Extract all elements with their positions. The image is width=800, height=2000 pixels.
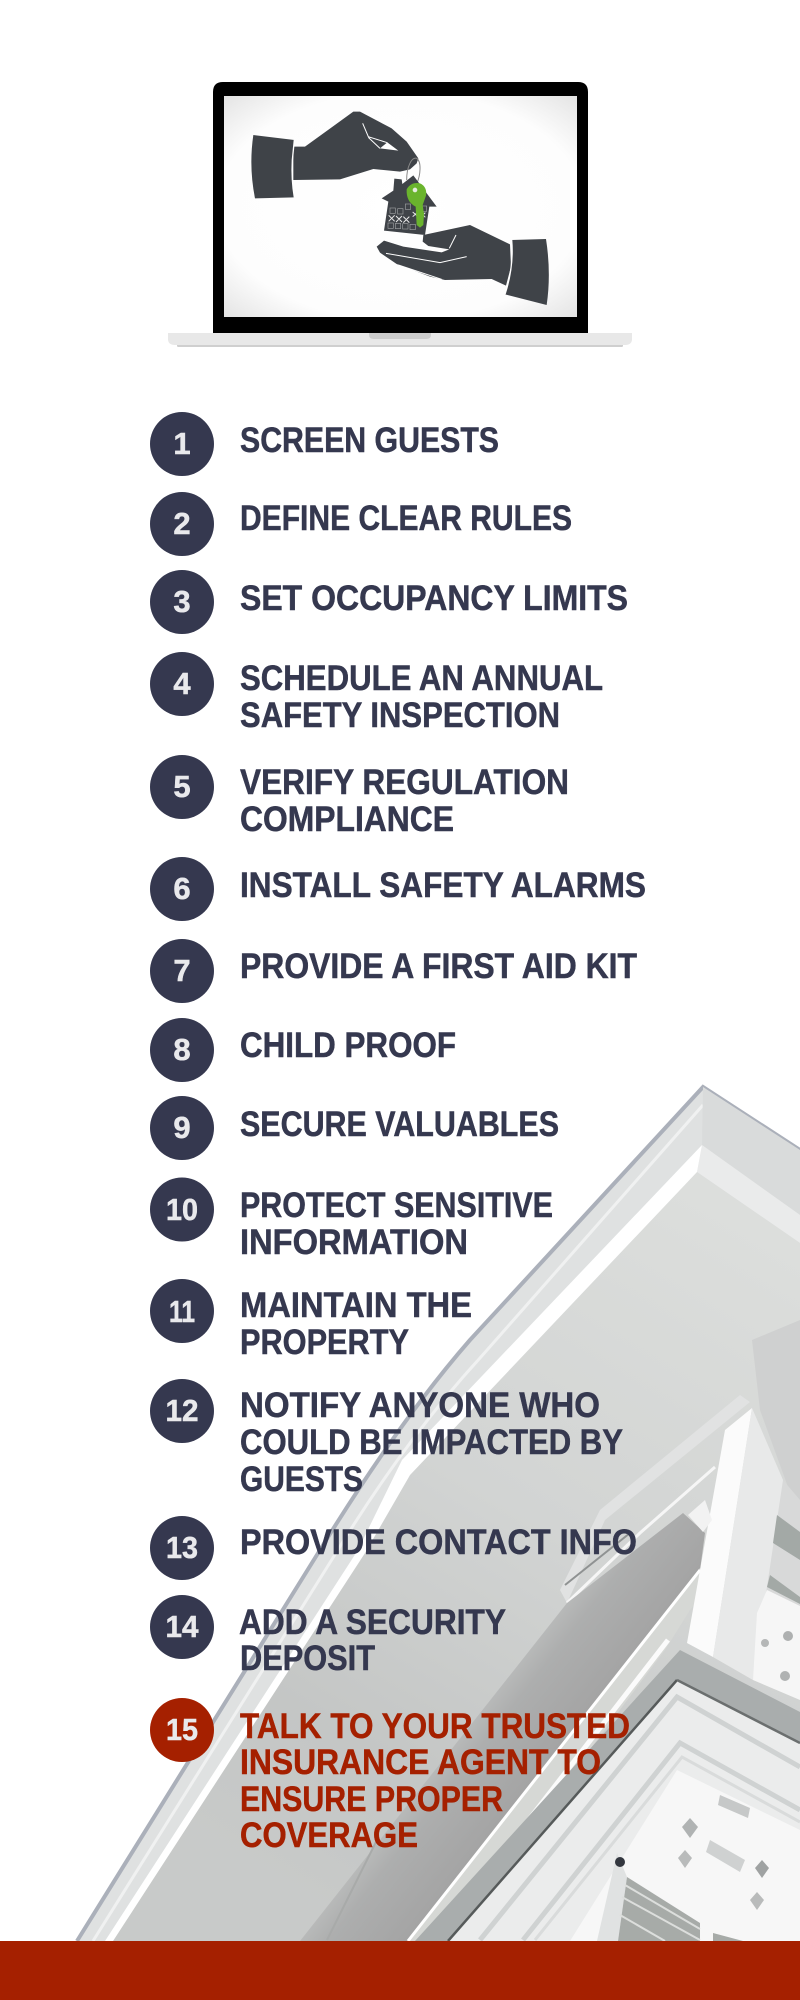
item 15 highlighted xyxy=(150,1698,630,1855)
item 13: PROVIDE CONTACT INFO xyxy=(240,1523,637,1562)
item 6: INSTALL SAFETY ALARMS xyxy=(240,866,646,905)
item 12 xyxy=(150,1379,623,1499)
item 8: CHILD PROOF xyxy=(240,1026,456,1065)
item 8: 8 xyxy=(173,1032,191,1067)
item 11 xyxy=(150,1279,472,1362)
item 10: PROTECT SENSITIVE xyxy=(240,1186,553,1225)
item 11: 11 xyxy=(169,1294,195,1329)
footer bar xyxy=(0,1941,800,2000)
icon: receiving hand xyxy=(377,225,549,305)
item 15 highlighted: ENSURE PROPER xyxy=(240,1780,503,1819)
item 2 xyxy=(150,492,572,556)
item 15 highlighted: INSURANCE AGENT TO xyxy=(240,1743,601,1782)
item 5 xyxy=(150,755,569,839)
icon: giving hand xyxy=(251,112,418,198)
item 5: VERIFY REGULATION xyxy=(240,763,569,802)
screen xyxy=(224,96,577,317)
item 5: 5 xyxy=(173,769,191,804)
item 4 xyxy=(150,652,603,735)
item 12: COULD BE IMPACTED BY xyxy=(240,1423,623,1462)
item 15 highlighted: 15 xyxy=(166,1712,198,1747)
item 12: 12 xyxy=(166,1393,198,1428)
item 2: 2 xyxy=(173,506,191,541)
item 3 xyxy=(150,570,628,634)
item 9 xyxy=(150,1096,559,1160)
item 14: DEPOSIT xyxy=(240,1639,375,1678)
item 13 xyxy=(150,1516,637,1580)
item 1 xyxy=(150,412,499,476)
laptop screen frame xyxy=(213,82,588,333)
item 10: 10 xyxy=(166,1192,198,1227)
item 10 xyxy=(150,1178,553,1262)
item 6: 6 xyxy=(173,871,191,906)
item 7: PROVIDE A FIRST AID KIT xyxy=(240,947,637,986)
item 3: 3 xyxy=(173,584,191,619)
item 14 xyxy=(150,1595,506,1678)
checklist xyxy=(150,412,646,1855)
item 12: GUESTS xyxy=(240,1460,363,1499)
item 9: SECURE VALUABLES xyxy=(240,1105,559,1144)
item 11: MAINTAIN THE xyxy=(240,1286,472,1325)
item 1: 1 xyxy=(173,426,191,461)
item 3: SET OCCUPANCY LIMITS xyxy=(240,579,628,618)
item 8 xyxy=(150,1018,456,1082)
item 15 highlighted: TALK TO YOUR TRUSTED xyxy=(240,1707,630,1746)
item 4: SCHEDULE AN ANNUAL xyxy=(240,659,603,698)
item 13: 13 xyxy=(166,1530,198,1565)
item 9: 9 xyxy=(173,1110,191,1145)
icon: green key xyxy=(407,183,426,228)
laptop with hands handing over house key xyxy=(168,82,632,347)
item 7 xyxy=(150,939,637,1003)
item 14: 14 xyxy=(166,1609,199,1644)
item 11: PROPERTY xyxy=(240,1323,409,1362)
item 4: 4 xyxy=(173,666,191,701)
item 14: ADD A SECURITY xyxy=(239,1603,506,1642)
item 12: NOTIFY ANYONE WHO xyxy=(240,1386,600,1425)
item 7: 7 xyxy=(173,953,191,988)
item 5: COMPLIANCE xyxy=(240,800,454,839)
item 10: INFORMATION xyxy=(240,1223,468,1262)
icon: key ring xyxy=(407,158,420,184)
photo: white house eaves corner xyxy=(77,1087,800,1941)
item 1: SCREEN GUESTS xyxy=(240,421,499,460)
icon: house keychain xyxy=(382,175,437,235)
item 2: DEFINE CLEAR RULES xyxy=(240,499,572,538)
icon: hands, house keychain and key xyxy=(251,112,549,305)
item 6 xyxy=(150,857,646,921)
item 15 highlighted: COVERAGE xyxy=(240,1816,418,1855)
item 4: SAFETY INSPECTION xyxy=(240,696,560,735)
laptop base xyxy=(168,333,632,347)
